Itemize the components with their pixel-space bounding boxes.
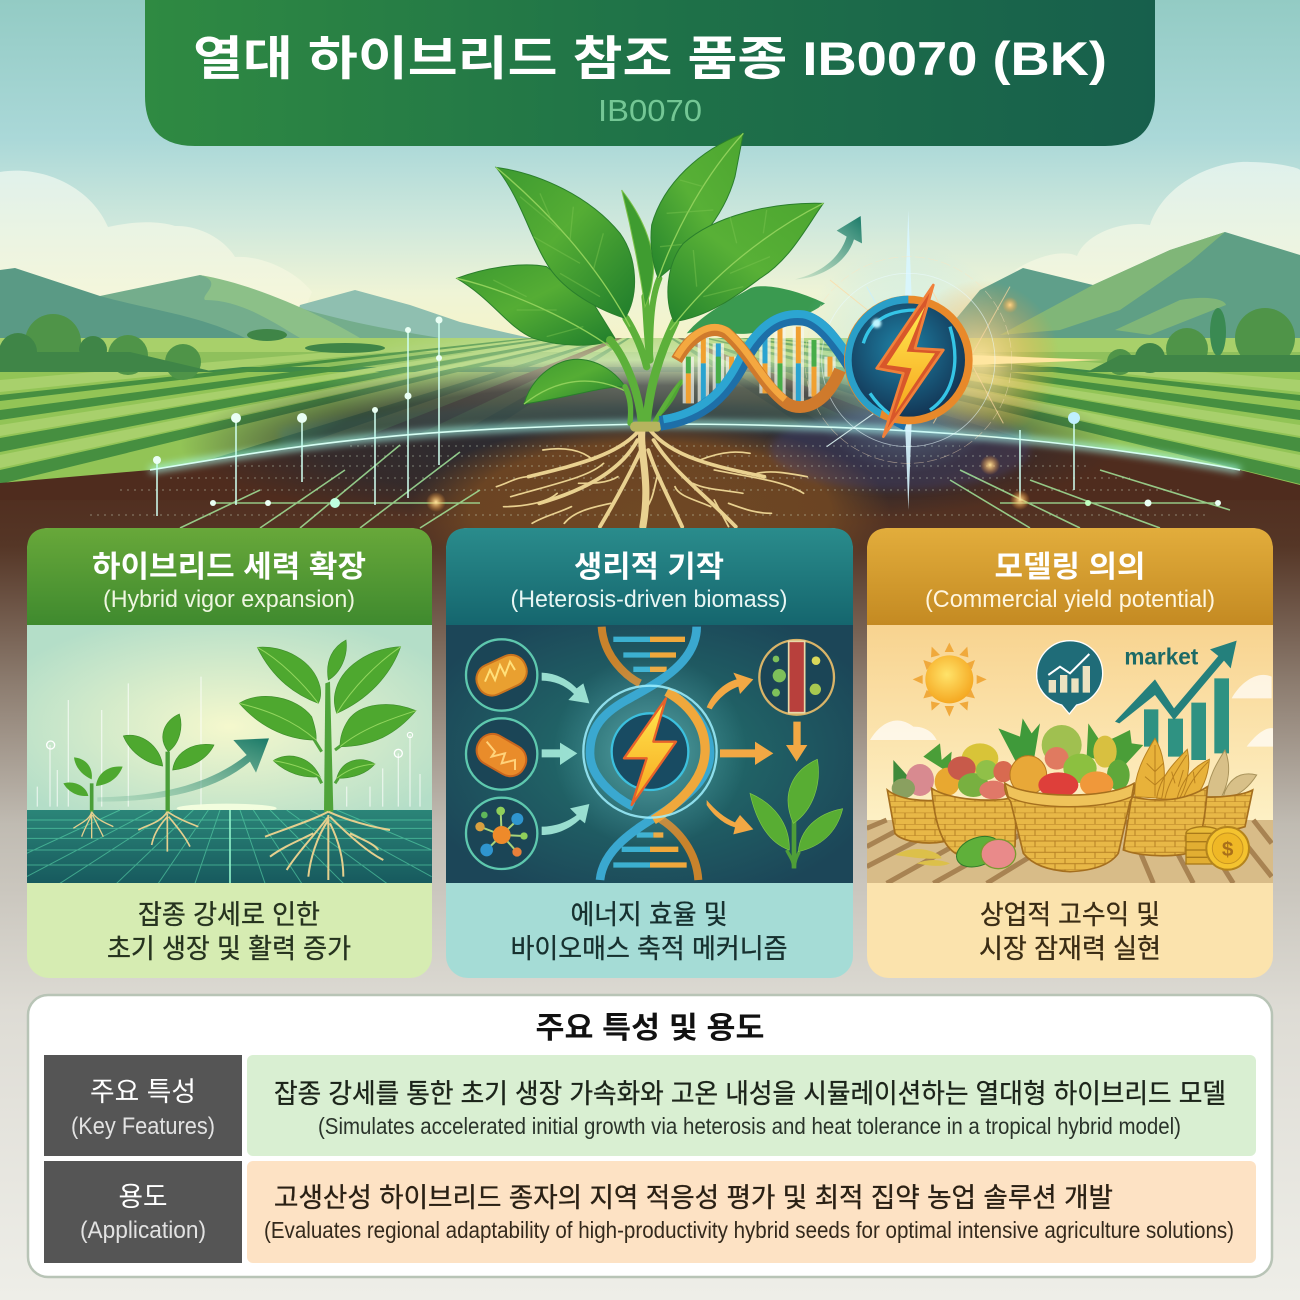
mountains right [940, 232, 1300, 338]
row: key features: (Key Features) [71, 1113, 215, 1140]
panel heading: (Hybrid vigor expansion) [103, 586, 355, 613]
gold coins [1186, 827, 1249, 870]
panel description [107, 900, 351, 964]
mature plant stage [239, 640, 416, 880]
row: key features: 주요 특성 [90, 1077, 196, 1107]
far-left leaf [457, 265, 615, 345]
panel description: 초기 생장 및 활력 증가 [107, 934, 351, 964]
row: application: 용도 [118, 1182, 168, 1212]
row: application: 고생산성 하이브리드 종자의 지역 적응성 평가 및 최적 집약 농업 솔루션 개발 [274, 1183, 1113, 1213]
row: application: (Application) [80, 1217, 206, 1244]
growth arrow [795, 216, 862, 279]
output: leaf sprig [750, 759, 843, 868]
chart: energy pathway diagram [446, 624, 853, 883]
chart: rising market bars [1115, 641, 1237, 760]
icon: chart bubble [1037, 641, 1103, 714]
panel heading [27, 528, 432, 625]
panel description [979, 900, 1161, 964]
output arrows [707, 673, 807, 834]
subtitle code: IB0070 [598, 93, 702, 128]
lower-left leaf [524, 359, 625, 404]
seedling stage [63, 757, 123, 838]
energy burst [795, 210, 1103, 510]
panel description: 바이오매스 축적 메커니즘 [510, 934, 788, 964]
circuit ground grid with soil [0, 297, 1300, 600]
panel description: 상업적 고수익 및 [980, 900, 1160, 930]
narrow centre leaf [622, 190, 653, 307]
panel description: 시장 잠재력 실현 [979, 934, 1161, 964]
market label: market [1124, 643, 1199, 669]
title: 열대 하이브리드 참조 품종 IB0070 (BK) [193, 32, 1107, 85]
growth arrow [97, 738, 269, 802]
header banner [145, 0, 1155, 146]
panel: commercial yield potential [867, 528, 1273, 978]
centre produce [998, 718, 1143, 798]
mountains left [0, 268, 530, 338]
panel: key features and application table [28, 995, 1272, 1277]
chart: three growth stages over digital grid [27, 624, 433, 883]
panel heading: 생리적 기작 [574, 551, 724, 584]
rear produce [892, 743, 1013, 799]
row: key features: (Simulates accelerated initial growth via heterosis and heat tolerance in a tropical hybrid model) [318, 1113, 1181, 1139]
table heading: 주요 특성 및 용도 [536, 1012, 764, 1045]
distant tree lines [0, 308, 1300, 380]
panel heading [446, 528, 853, 625]
row: application [44, 1161, 1256, 1263]
row: key features [44, 1055, 1256, 1156]
panel heading: (Commercial yield potential) [925, 586, 1215, 613]
upper-left large leaf [496, 167, 635, 318]
helix rungs [613, 639, 653, 865]
stems [610, 278, 682, 427]
output: tissue circle [759, 640, 834, 715]
DNA helix [660, 314, 907, 423]
baskets of produce [887, 718, 1257, 872]
row: key features: 잡종 강세를 통한 초기 생장 가속화와 고온 내성을 시뮬레이션하는 열대형 하이브리드 모델 [274, 1079, 1226, 1109]
panel heading: 하이브리드 세력 확장 [92, 551, 366, 584]
panel description: 잡종 강세로 인한 [138, 900, 320, 930]
icon: sun [913, 643, 987, 717]
chart: market and harvest illustration [867, 624, 1273, 883]
input circles [466, 639, 537, 869]
clouds [0, 162, 1300, 320]
right large leaf [668, 203, 823, 322]
hero illustration: plant roots [496, 423, 807, 527]
wheat sheaves [1135, 738, 1257, 800]
panel heading: 모델링 의의 [994, 551, 1146, 584]
hero illustration: plant leaves and stems [457, 133, 1103, 510]
panel description: 에너지 효율 및 [570, 900, 728, 930]
energy orb with lightning bolt [844, 285, 973, 437]
glow ring [583, 686, 717, 818]
input arrows [542, 673, 589, 835]
crop fields [0, 338, 1300, 485]
panel: heterosis-driven biomass [446, 528, 853, 978]
panel heading: (Heterosis-driven biomass) [510, 586, 788, 613]
gold coins: $ [1222, 838, 1234, 861]
lightning bolt [624, 698, 676, 805]
top centre leaf [651, 133, 743, 278]
back leaf right [687, 286, 825, 334]
young plant stage [123, 714, 214, 852]
small sprout leaf [660, 382, 682, 417]
guava and grain on table [895, 836, 1016, 870]
panel heading [867, 528, 1273, 625]
panel description [510, 900, 788, 964]
panel: hybrid vigor expansion [27, 528, 433, 978]
